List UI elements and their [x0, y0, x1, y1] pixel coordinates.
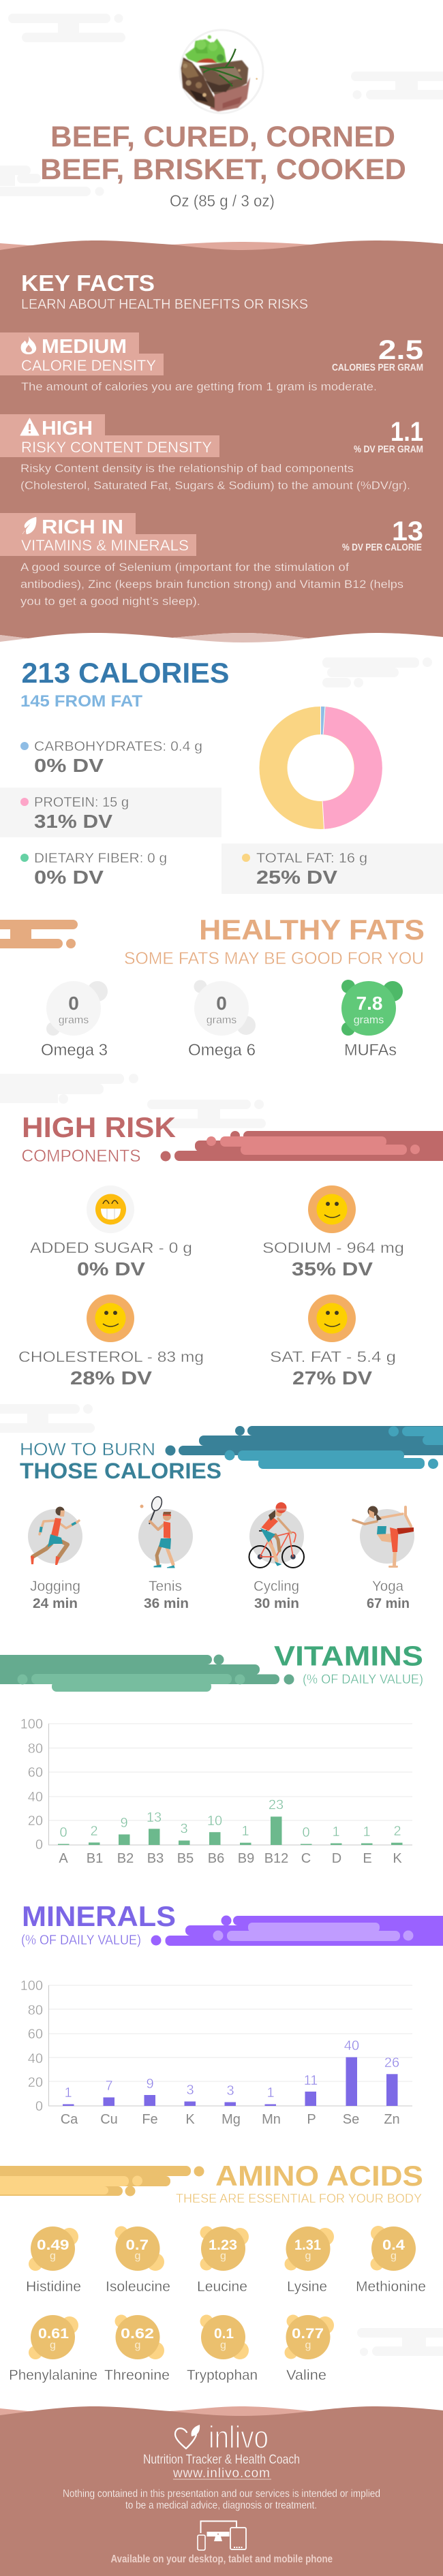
- panel: key facts: [0, 240, 443, 642]
- vitamins and minerals block: RICH IN: [42, 516, 123, 538]
- amino: threonine: 0.62: [121, 2326, 154, 2342]
- risky content density block: % DV PER GRAM: [354, 444, 423, 455]
- minerals bar chart: K: [185, 2112, 195, 2127]
- vitamins bar chart: 0: [35, 1837, 43, 1852]
- minerals bar chart: [20, 1978, 412, 2127]
- minerals bar chart: 3: [226, 2083, 234, 2098]
- amino: histidine: [26, 2226, 81, 2295]
- activity labels: Yoga: [372, 1579, 403, 1594]
- omega 6: grams: [207, 1014, 236, 1026]
- dietary fiber row: DIETARY FIBER: 0 g: [34, 851, 167, 866]
- amino: lysine: Lysine: [287, 2279, 327, 2295]
- vitamins bar chart: 100: [20, 1717, 43, 1732]
- amino: leucine: 1.23: [209, 2237, 237, 2253]
- minerals bar chart: P: [307, 2112, 316, 2127]
- amino: threonine: Threonine: [104, 2368, 170, 2383]
- total fat row: TOTAL FAT: 16 g: [256, 851, 367, 866]
- mufas: 7.8: [356, 993, 382, 1014]
- added sugar: [30, 1185, 192, 1279]
- amino: lysine: g: [305, 2250, 311, 2262]
- omega 3: grams: [59, 1014, 89, 1026]
- minerals bar chart: 26: [384, 2055, 399, 2070]
- minerals bar chart: 40: [28, 2051, 43, 2066]
- amino: leucine: g: [220, 2250, 226, 2262]
- activity: jogging: [28, 1507, 82, 1565]
- vitamins and minerals block: antibodies), Zinc (keeps brain function strong) and Vitamin B12 (helps: [20, 578, 403, 591]
- vitamins and minerals block: VITAMINS & MINERALS: [21, 537, 189, 554]
- calorie density block: CALORIES PER GRAM: [332, 362, 423, 373]
- amino: methionine: Methionine: [356, 2279, 426, 2295]
- amino: valine: 0.77: [292, 2326, 324, 2342]
- amino: phenylalanine: g: [50, 2340, 56, 2351]
- healthy fats heading: [124, 914, 425, 968]
- saturated fat: [270, 1294, 396, 1388]
- minerals bar chart: Fe: [142, 2112, 158, 2127]
- footer: Nutrition Tracker & Health Coach: [143, 2453, 300, 2467]
- carbohydrates row: 0% DV: [34, 755, 104, 776]
- logo: inlivo: inlivo: [209, 2419, 269, 2455]
- calorie density block: 2.5: [378, 335, 423, 365]
- amino: histidine: 0.49: [37, 2237, 70, 2253]
- carbohydrates row: [20, 739, 202, 776]
- amino: valine: [285, 2315, 334, 2383]
- title: BEEF, BRISKET, COOKED: [40, 153, 406, 186]
- minerals bar chart: 11: [304, 2073, 318, 2088]
- mufas: MUFAs: [344, 1041, 397, 1059]
- activity: tennis: [138, 1495, 193, 1568]
- calories heading: 145 FROM FAT: [20, 692, 142, 711]
- vitamins and minerals block: [0, 513, 423, 608]
- amino: leucine: Leucine: [197, 2279, 247, 2295]
- omega 3: Omega 3: [41, 1041, 108, 1059]
- amino: tryptophan: 0.1: [214, 2326, 234, 2342]
- footer: Available on your desktop, tablet and mobile phone: [110, 2554, 333, 2565]
- healthy fats heading: HEALTHY FATS: [199, 914, 425, 946]
- amino: threonine: [104, 2315, 170, 2383]
- mufas: grams: [354, 1014, 384, 1026]
- burn calories heading: HOW TO BURN: [20, 1439, 155, 1459]
- cholesterol: 28% DV: [70, 1367, 152, 1388]
- vitamins bar chart: 60: [28, 1765, 43, 1780]
- high risk heading: HIGH RISK: [22, 1111, 176, 1143]
- calorie density block: The amount of calories you are getting from 1 gram is moderate.: [21, 380, 377, 393]
- minerals bar chart: 20: [28, 2075, 43, 2090]
- total fat row: [242, 851, 367, 888]
- activity labels: 30 min: [254, 1596, 299, 1611]
- omega 3: [41, 981, 108, 1059]
- vitamins bar chart: B3: [147, 1851, 164, 1866]
- vitamins and minerals block: 13: [392, 516, 423, 546]
- icon: leaf: [22, 517, 36, 534]
- risky content density block: 1.1: [391, 417, 423, 447]
- vitamins bar chart: 20: [28, 1814, 43, 1829]
- amino: phenylalanine: 0.61: [38, 2326, 69, 2342]
- amino: threonine: g: [135, 2340, 140, 2351]
- vitamins bar chart: D: [332, 1851, 341, 1866]
- amino: leucine: [197, 2226, 249, 2295]
- amino: histidine: Histidine: [26, 2279, 81, 2295]
- icon: smiling face: [87, 1294, 134, 1342]
- amino: isoleucine: [106, 2226, 170, 2295]
- icon: devices: [198, 2521, 246, 2550]
- website link: www.inlivo.com: [172, 2466, 270, 2481]
- added sugar: ADDED SUGAR - 0 g: [30, 1239, 192, 1256]
- minerals bar chart: 40: [344, 2038, 359, 2053]
- protein row: [20, 795, 129, 832]
- key facts heading: [21, 270, 308, 312]
- title: BEEF, CURED, CORNED: [50, 121, 395, 153]
- saturated fat: SAT. FAT - 5.4 g: [270, 1348, 396, 1365]
- minerals bar chart: Se: [343, 2112, 359, 2127]
- high risk heading: [22, 1111, 176, 1166]
- calories heading: [20, 657, 229, 711]
- healthy fats heading: SOME FATS MAY BE GOOD FOR YOU: [124, 949, 424, 968]
- key facts heading: KEY FACTS: [21, 270, 155, 296]
- vitamins heading: [274, 1641, 423, 1687]
- minerals bar chart: Mg: [222, 2112, 241, 2127]
- vitamins bar chart: 9: [120, 1816, 128, 1831]
- amino: tryptophan: Tryptophan: [187, 2368, 258, 2383]
- icon: warning triangle: [20, 418, 39, 435]
- icon: smiling face: [308, 1294, 356, 1342]
- protein row: PROTEIN: 15 g: [34, 795, 129, 810]
- amino: lysine: 1.31: [294, 2237, 321, 2253]
- total fat row: 25% DV: [256, 867, 337, 888]
- risky content density block: [0, 414, 423, 492]
- calorie density block: [0, 332, 423, 393]
- activity labels: [30, 1579, 410, 1611]
- risky content density block: (Cholesterol, Saturated Fat, Sugars & Sodium) to the amount (%DV/gr).: [20, 479, 410, 492]
- minerals bar chart: Zn: [384, 2112, 400, 2127]
- activity labels: Cycling: [254, 1579, 299, 1594]
- vitamins bar chart: B2: [117, 1851, 134, 1866]
- amino acids heading: THESE ARE ESSENTIAL FOR YOUR BODY: [176, 2192, 422, 2205]
- amino acids heading: AMINO ACIDS: [215, 2160, 423, 2192]
- activity: cycling: [249, 1502, 304, 1568]
- amino: lysine: [285, 2226, 334, 2295]
- amino: isoleucine: Isoleucine: [106, 2279, 170, 2295]
- minerals bar chart: 80: [28, 2003, 43, 2018]
- amino: phenylalanine: [9, 2315, 97, 2383]
- added sugar: 0% DV: [77, 1258, 145, 1279]
- minerals bar chart: 9: [146, 2077, 154, 2092]
- minerals heading: (% OF DAILY VALUE): [21, 1933, 141, 1948]
- vitamins bar chart: 1: [332, 1825, 340, 1840]
- amino: tryptophan: [187, 2315, 258, 2383]
- icon: grinning face: [87, 1185, 134, 1233]
- key facts heading: LEARN ABOUT HEALTH BENEFITS OR RISKS: [21, 297, 308, 312]
- vitamins bar chart: 2: [393, 1824, 401, 1839]
- dietary fiber row: 0% DV: [34, 867, 104, 888]
- amino: methionine: 0.4: [382, 2237, 405, 2253]
- activity: yoga: [353, 1506, 414, 1568]
- vitamins bar chart: 1: [363, 1825, 371, 1840]
- vitamins bar chart: E: [363, 1851, 372, 1866]
- disclaimer: [63, 2488, 380, 2511]
- vitamins bar chart: B5: [177, 1851, 194, 1866]
- amino: tryptophan: g: [220, 2340, 226, 2351]
- amino: methionine: g: [391, 2250, 397, 2262]
- footer: [0, 2406, 443, 2576]
- vitamins and minerals block: A good source of Selenium (important for the stimulation of: [20, 561, 349, 574]
- risky content density block: RISKY CONTENT DENSITY: [21, 439, 212, 456]
- vitamins bar chart: 0: [302, 1825, 310, 1840]
- vitamins bar chart: C: [301, 1851, 311, 1866]
- vitamins heading: (% OF DAILY VALUE): [303, 1673, 423, 1687]
- cholesterol: [18, 1294, 204, 1388]
- vitamins bar chart: B1: [87, 1851, 103, 1866]
- calorie density block: CALORIE DENSITY: [21, 357, 156, 374]
- amino acids heading: [176, 2160, 423, 2205]
- icon: smiling face: [308, 1185, 356, 1233]
- omega 6: [188, 980, 256, 1059]
- calorie density block: MEDIUM: [42, 336, 127, 358]
- vitamins and minerals block: you to get a good night’s sleep).: [20, 595, 200, 608]
- amino: methionine: [356, 2226, 426, 2295]
- sodium: [262, 1185, 404, 1279]
- sodium: SODIUM - 964 mg: [262, 1239, 404, 1256]
- amino: isoleucine: g: [135, 2250, 140, 2262]
- icon: flame: [21, 336, 36, 354]
- cholesterol: CHOLESTEROL - 83 mg: [18, 1348, 204, 1365]
- vitamins and minerals block: % DV PER CALORIE: [342, 542, 422, 553]
- vitamins bar chart: B9: [238, 1851, 254, 1866]
- activity labels: Jogging: [30, 1579, 80, 1594]
- vitamins bar chart: 80: [28, 1741, 43, 1756]
- omega 6: 0: [216, 993, 227, 1014]
- sodium: 35% DV: [292, 1258, 373, 1279]
- minerals bar chart: 60: [28, 2027, 43, 2042]
- amino: histidine: g: [50, 2250, 56, 2262]
- high risk heading: COMPONENTS: [22, 1147, 140, 1166]
- burn calories heading: [20, 1439, 222, 1483]
- mufas: [341, 980, 403, 1059]
- serving size: Oz (85 g / 3 oz): [170, 192, 275, 211]
- logo: inlivo: [175, 2419, 269, 2455]
- icon: heart with leaf: [175, 2425, 200, 2449]
- vitamins bar chart: 2: [90, 1824, 98, 1839]
- donut chart: [273, 707, 368, 829]
- vitamins bar chart: 40: [28, 1790, 43, 1805]
- vitamins bar chart: K: [393, 1851, 402, 1866]
- minerals bar chart: Cu: [100, 2112, 118, 2127]
- minerals bar chart: 100: [20, 1978, 43, 1993]
- minerals bar chart: 3: [186, 2083, 194, 2098]
- vitamins bar chart: 23: [269, 1797, 284, 1812]
- saturated fat: 27% DV: [292, 1367, 372, 1388]
- activity labels: Tenis: [149, 1579, 182, 1594]
- vitamins bar chart: 13: [147, 1810, 162, 1825]
- activity labels: 36 min: [144, 1596, 189, 1611]
- title: [40, 121, 406, 186]
- activity labels: 67 min: [367, 1596, 410, 1611]
- disclaimer: to be a medical advice, diagnosis or treatment.: [125, 2500, 317, 2511]
- vitamins bar chart: B12: [264, 1851, 288, 1866]
- amino: valine: Valine: [286, 2368, 326, 2383]
- vitamins bar chart: [20, 1717, 412, 1866]
- carbohydrates row: CARBOHYDRATES: 0.4 g: [34, 739, 202, 754]
- dietary fiber row: [20, 851, 167, 888]
- minerals bar chart: 1: [266, 2085, 275, 2100]
- risky content density block: Risky Content density is the relationship of bad components: [20, 462, 354, 475]
- vitamins bar chart: 0: [59, 1825, 67, 1840]
- protein row: 31% DV: [34, 811, 112, 832]
- disclaimer: Nothing contained in this presentation and our services is intended or implied: [63, 2488, 380, 2500]
- minerals bar chart: 7: [105, 2079, 113, 2094]
- minerals heading: [21, 1900, 176, 1948]
- vitamins bar chart: B6: [208, 1851, 224, 1866]
- omega 3: 0: [68, 993, 79, 1014]
- burn calories heading: THOSE CALORIES: [20, 1459, 222, 1483]
- vitamins heading: VITAMINS: [274, 1641, 423, 1672]
- macronutrient rows: [0, 739, 443, 894]
- amino: phenylalanine: Phenylalanine: [9, 2368, 97, 2383]
- food photo: steak with garnish: [180, 30, 263, 113]
- minerals bar chart: Ca: [61, 2112, 78, 2127]
- omega 6: Omega 6: [188, 1041, 256, 1059]
- minerals bar chart: Mn: [262, 2112, 281, 2127]
- amino: isoleucine: 0.7: [125, 2237, 149, 2253]
- minerals bar chart: 1: [64, 2085, 72, 2100]
- vitamins bar chart: 3: [180, 1822, 188, 1837]
- minerals bar chart: 0: [35, 2099, 43, 2114]
- vitamins bar chart: 1: [241, 1824, 249, 1839]
- activity labels: 24 min: [33, 1596, 78, 1611]
- calories heading: 213 CALORIES: [22, 657, 229, 689]
- vitamins bar chart: 10: [207, 1814, 222, 1829]
- minerals heading: MINERALS: [22, 1900, 176, 1932]
- amino: valine: g: [305, 2340, 311, 2351]
- vitamins bar chart: A: [59, 1851, 68, 1866]
- risky content density block: HIGH: [42, 418, 93, 439]
